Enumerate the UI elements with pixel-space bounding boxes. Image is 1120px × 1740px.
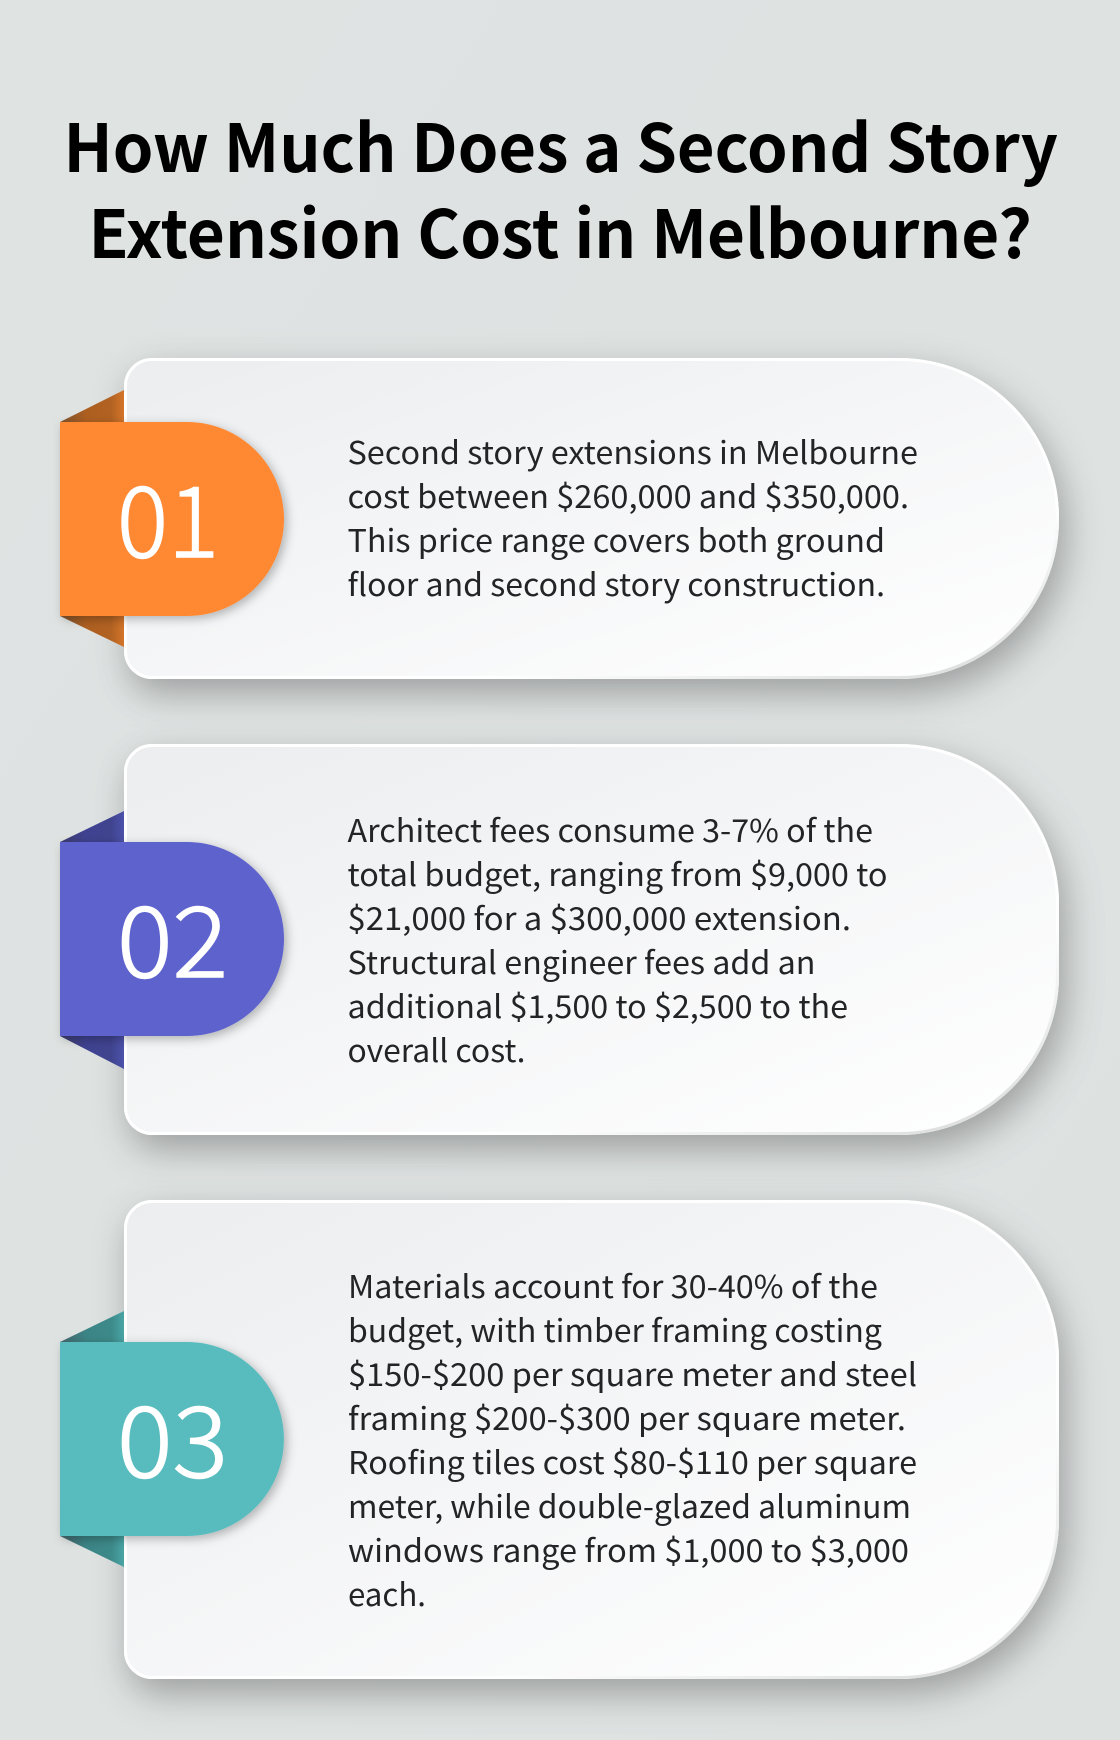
text block 02 — [348, 806, 888, 1072]
card background 02 — [124, 744, 1059, 1135]
text block 01 — [348, 428, 918, 606]
number badge 02 — [60, 842, 284, 1036]
card background 03 — [124, 1200, 1059, 1679]
ribbon folds 01 — [60, 390, 124, 647]
text block 03: meter, while double-glazed aluminum — [348, 1482, 911, 1528]
ribbon folds 03 — [60, 1311, 124, 1567]
text block 02: total budget, ranging from $9,000 to — [348, 850, 888, 896]
title: How Much Does a Second Story — [64, 96, 1058, 192]
text block 03: budget, with timber framing costing — [348, 1306, 882, 1352]
number badge 03: 03 — [117, 1364, 228, 1506]
number badge 02: 02 — [117, 864, 228, 1006]
text block 03 — [348, 1262, 917, 1616]
panel: step 02 — [60, 744, 1059, 1135]
text block 02: Architect fees consume 3-7% of the — [348, 806, 873, 852]
text block 02: overall cost. — [348, 1026, 526, 1072]
text block 01: cost between $260,000 and $350,000. — [348, 472, 909, 518]
title: Extension Cost in Melbourne? — [88, 182, 1032, 278]
text block 03: windows range from $1,000 to $3,000 — [348, 1526, 909, 1572]
text block 03: framing $200-$300 per square meter. — [348, 1394, 906, 1440]
title — [64, 96, 1058, 278]
panel: step 01 — [60, 358, 1059, 679]
text block 03: $150-$200 per square meter and steel — [348, 1350, 917, 1396]
number badge 03 — [60, 1342, 284, 1536]
text block 01: floor and second story construction. — [348, 560, 885, 606]
text block 02: additional $1,500 to $2,500 to the — [348, 982, 848, 1028]
text block 01: This price range covers both ground — [348, 516, 885, 562]
ribbon folds 02 — [60, 811, 124, 1069]
number badge 01: 01 — [117, 444, 219, 586]
text block 02: $21,000 for a $300,000 extension. — [348, 894, 851, 940]
number badge 01 — [60, 422, 284, 616]
card background 01 — [124, 358, 1059, 679]
text block 01: Second story extensions in Melbourne — [348, 428, 918, 474]
text block 03: Materials account for 30-40% of the — [348, 1262, 878, 1308]
text block 03: each. — [348, 1570, 426, 1616]
text block 03: Roofing tiles cost $80-$110 per square — [348, 1438, 917, 1484]
panel: step 03 — [60, 1200, 1059, 1679]
text block 02: Structural engineer fees add an — [348, 938, 816, 984]
